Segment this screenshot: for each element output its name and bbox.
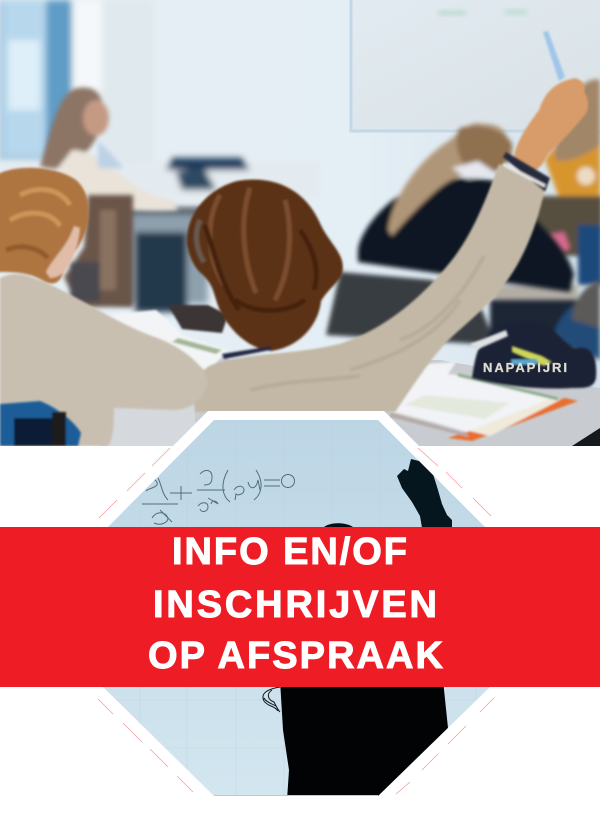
heading line 3: OP AFSPRAAK xyxy=(148,635,444,677)
chair xyxy=(64,195,133,307)
papers on desk xyxy=(100,305,228,372)
silhouette head xyxy=(324,523,353,527)
front desk xyxy=(100,356,600,446)
background desks xyxy=(2,152,254,318)
board bottom edge xyxy=(214,795,378,796)
octagon chalkboard photo xyxy=(90,415,500,800)
curly hair xyxy=(263,687,280,712)
dark floor corner xyxy=(572,428,600,446)
handwritten formula xyxy=(142,470,294,524)
front student hair xyxy=(187,180,343,359)
student with dark jumper xyxy=(358,123,574,292)
back wall xyxy=(0,0,600,446)
silhouette raised hand xyxy=(397,459,452,528)
brand label: NAPAPIJRI xyxy=(483,360,567,375)
front student raised arm and jumper xyxy=(194,152,550,412)
heading line 1: INFO EN/OF xyxy=(172,531,407,573)
octagon white frame xyxy=(86,411,506,812)
window xyxy=(0,0,100,163)
left front student xyxy=(0,168,208,446)
red banner xyxy=(0,527,600,687)
hand holding pen xyxy=(513,31,588,172)
pencil case xyxy=(470,321,596,389)
classroom photo xyxy=(0,0,600,446)
banner heading xyxy=(148,531,444,677)
orange folder and notebook xyxy=(384,362,578,441)
whiteboard xyxy=(351,0,600,131)
white strip below photo xyxy=(0,446,600,813)
blue backpack xyxy=(0,401,81,446)
pale blue board background xyxy=(90,415,500,800)
faint grid lines xyxy=(140,700,476,795)
faint red frame dashes xyxy=(98,448,494,794)
heading line 2: INSCHRIJVEN xyxy=(153,584,437,626)
right side background students xyxy=(494,79,600,305)
silhouette body xyxy=(280,687,448,796)
dark coat on chair xyxy=(326,272,600,360)
blurred student with long hair xyxy=(40,87,178,211)
